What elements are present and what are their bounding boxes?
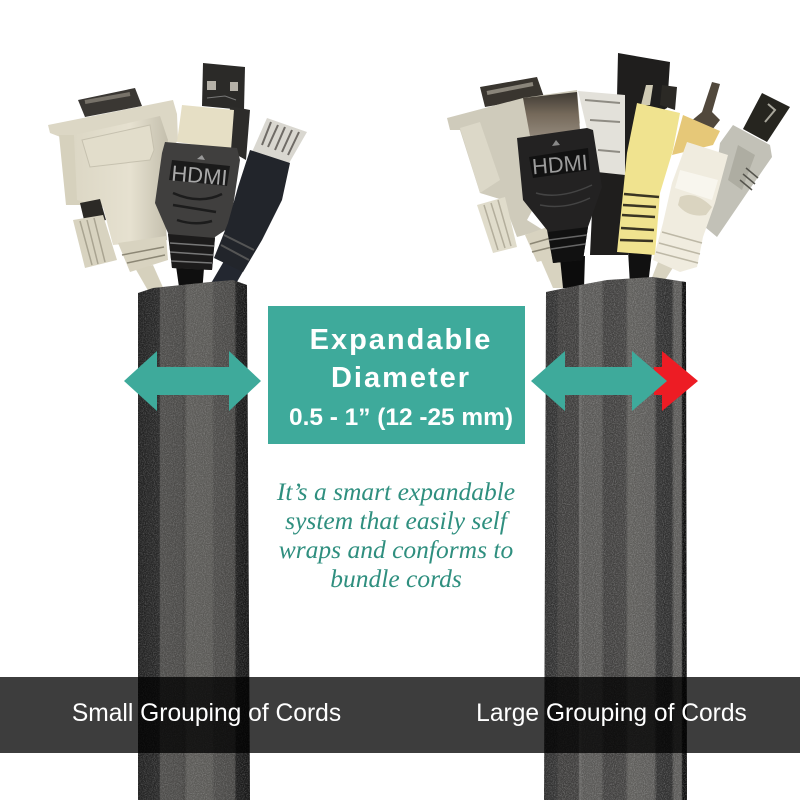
icon: HDMI connector (155, 105, 250, 294)
arrow: red expansion arrowhead (654, 351, 698, 411)
size range: 0.5 - 1” (12 -25 mm) (289, 404, 513, 431)
icon: VGA connector (48, 88, 178, 294)
icon: ethernet plug (210, 118, 307, 294)
description text: system that easily self (285, 506, 511, 535)
icon: cream ethernet plug (648, 142, 728, 288)
icon: white ethernet plug behind (578, 91, 625, 175)
arrow: left double arrow (124, 351, 261, 411)
icon: yellow RCA plug (617, 85, 680, 285)
caption: large grouping: Large Grouping of Cords (476, 700, 747, 727)
arrow: right double arrow (531, 351, 667, 411)
icon: USB plug (202, 63, 245, 110)
left cable bundle (48, 63, 307, 294)
description text (276, 477, 515, 593)
HDMI label: HDMI (170, 161, 228, 190)
description text: It’s a smart expandable (276, 477, 515, 506)
icon: second RCA plug (672, 82, 720, 155)
heading: Expandable (310, 324, 492, 356)
description text: bundle cords (330, 564, 462, 593)
caption band (0, 677, 800, 753)
icon: HDMI connector (517, 92, 602, 288)
left cable sleeve (138, 278, 250, 800)
description text: wraps and conforms to (279, 535, 513, 564)
right cable bundle (447, 53, 790, 288)
icon: USB plug behind (590, 53, 670, 255)
icon: VGA connector (447, 77, 580, 288)
heading line two: Diameter (331, 362, 471, 394)
panel: expandable diameter (268, 306, 525, 444)
caption: small grouping: Small Grouping of Cords (72, 700, 341, 727)
HDMI label: HDMI (531, 150, 589, 179)
right cable sleeve (544, 276, 688, 800)
icon: grey mini USB plug (705, 93, 790, 237)
